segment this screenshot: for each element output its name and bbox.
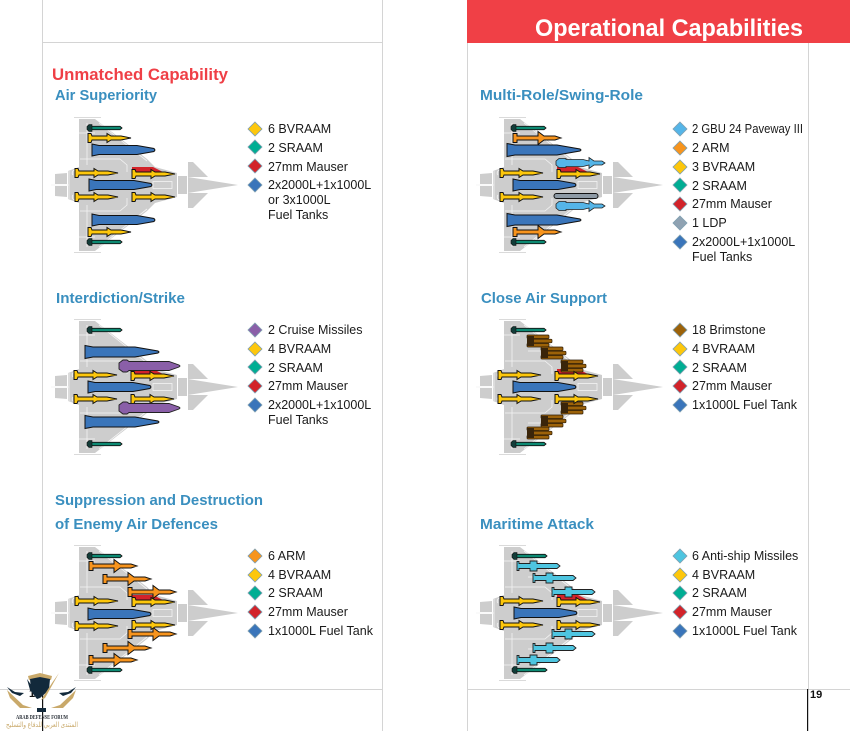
legend: multi-role: 27mm Mauser xyxy=(692,197,772,211)
legend: interdiction: Fuel Tanks xyxy=(268,413,328,427)
legend: multi-role: Fuel Tanks xyxy=(692,250,752,264)
legend: maritime attack: 2 SRAAM xyxy=(692,586,747,600)
legend: interdiction xyxy=(248,323,371,427)
legend: air superiority: 6 BVRAAM xyxy=(268,122,331,136)
legend: SEAD: 1x1000L Fuel Tank xyxy=(268,624,374,638)
page number 19 xyxy=(807,689,822,731)
legend: SEAD: 27mm Mauser xyxy=(268,605,348,619)
legend: air superiority: or 3x1000L xyxy=(268,193,331,207)
legend: maritime attack xyxy=(673,549,798,638)
legend: SEAD xyxy=(248,549,374,638)
legend: maritime attack: 6 Anti-ship Missiles xyxy=(692,549,798,563)
legend: interdiction: 27mm Mauser xyxy=(268,379,348,393)
legend: air superiority: 2 SRAAM xyxy=(268,141,323,155)
heading: Suppression and Destruction of Enemy Air Defences: of Enemy Air Defences xyxy=(55,516,218,533)
page number 19: 19 xyxy=(810,689,822,701)
page number 18 xyxy=(29,688,43,731)
heading: Maritime Attack: Maritime Attack xyxy=(480,516,595,533)
legend: air superiority: 2x2000L+1x1000L xyxy=(268,178,371,192)
header banner xyxy=(467,0,850,43)
legend: close air support: 27mm Mauser xyxy=(692,379,772,393)
header banner: Operational Capabilities xyxy=(535,15,803,42)
legend: air superiority: 27mm Mauser xyxy=(268,160,348,174)
legend: SEAD: 2 SRAAM xyxy=(268,586,323,600)
heading: Unmatched Capability: Unmatched Capability xyxy=(52,66,229,84)
legend: maritime attack: 4 BVRAAM xyxy=(692,568,755,582)
panel: right page frame xyxy=(467,43,850,731)
legend: interdiction: 2 SRAAM xyxy=(268,361,323,375)
legend: multi-role: 3 BVRAAM xyxy=(692,160,755,174)
legend: close air support: 4 BVRAAM xyxy=(692,342,755,356)
heading: Suppression and Destruction of Enemy Air Defences: Suppression and Destruction xyxy=(55,492,263,509)
legend: SEAD: 4 BVRAAM xyxy=(268,568,331,582)
watermark logo: Arab Defense Forum: المنتدى العربي للدفاع والتسليح xyxy=(6,722,78,729)
diagram: maritime attack loadout xyxy=(476,545,663,681)
legend: multi-role: 2x2000L+1x1000L xyxy=(692,235,795,249)
legend: close air support: 2 SRAAM xyxy=(692,361,747,375)
heading: Multi-Role/Swing-Role: Multi-Role/Swing-Role xyxy=(480,87,643,104)
legend: multi-role xyxy=(673,122,803,264)
legend: interdiction: 2 Cruise Missiles xyxy=(268,323,362,337)
watermark logo: Arab Defense Forum xyxy=(6,673,78,729)
legend: multi-role: 2 ARM xyxy=(692,141,730,155)
legend: maritime attack: 1x1000L Fuel Tank xyxy=(692,624,798,638)
diagram: multi-role loadout xyxy=(476,117,663,253)
legend: close air support xyxy=(673,323,798,412)
legend: interdiction: 4 BVRAAM xyxy=(268,342,331,356)
panel: left page frame xyxy=(0,0,382,731)
diagram: interdiction loadout xyxy=(51,319,238,455)
legend: air superiority: Fuel Tanks xyxy=(268,208,328,222)
legend: close air support: 18 Brimstone xyxy=(692,323,766,337)
legend: maritime attack: 27mm Mauser xyxy=(692,605,772,619)
watermark logo: Arab Defense Forum: ARAB DEFENSE FORUM xyxy=(16,715,68,721)
heading: Suppression and Destruction of Enemy Air Defences xyxy=(55,492,263,533)
legend: air superiority xyxy=(248,122,371,222)
legend: interdiction: 2x2000L+1x1000L xyxy=(268,398,371,412)
heading: Air Superiority: Air Superiority xyxy=(55,87,158,104)
legend: SEAD: 6 ARM xyxy=(268,549,306,563)
diagram: close air support loadout xyxy=(476,319,663,455)
diagram: air superiority loadout xyxy=(51,117,238,253)
heading: Interdiction/Strike: Interdiction/Strike xyxy=(56,290,185,307)
page number 18: 18 xyxy=(29,688,41,700)
heading: Close Air Support: Close Air Support xyxy=(481,290,607,307)
legend: multi-role: 2 SRAAM xyxy=(692,179,747,193)
legend: multi-role: 2 GBU 24 Paveway III xyxy=(692,122,803,136)
legend: multi-role: 1 LDP xyxy=(692,216,727,230)
diagram: SEAD loadout xyxy=(51,545,238,681)
legend: close air support: 1x1000L Fuel Tank xyxy=(692,398,798,412)
